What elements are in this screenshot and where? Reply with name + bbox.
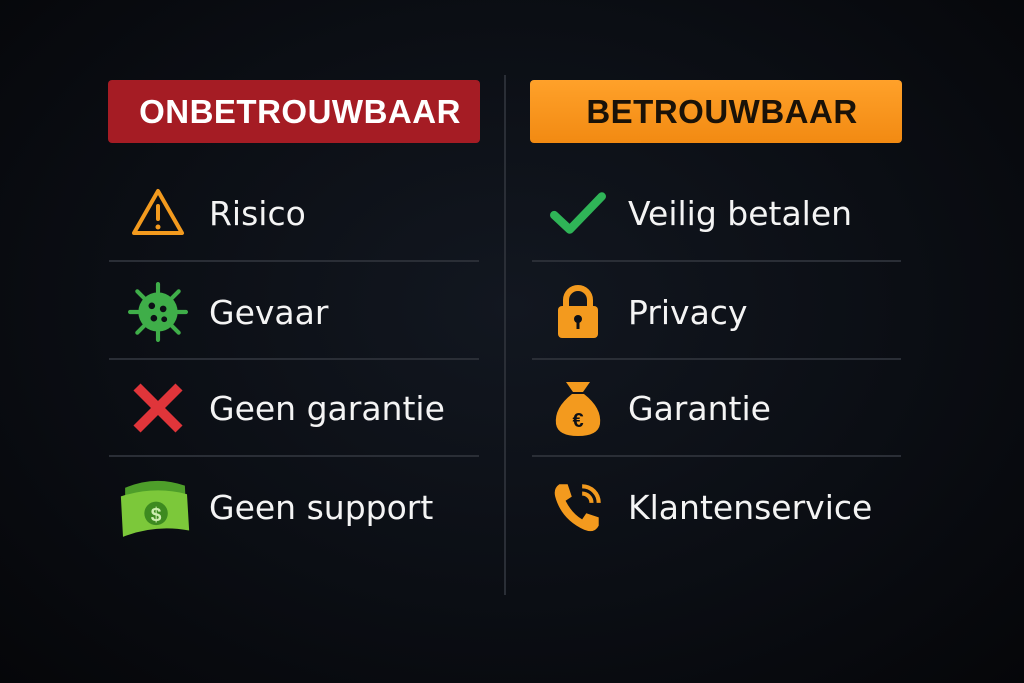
icon: warning: [132, 188, 184, 235]
icon: money bag euro: €: [572, 410, 584, 432]
icon: money bag euro: [556, 382, 600, 436]
icon: check: [550, 192, 606, 234]
row: geen support: Geen support: [209, 488, 433, 526]
header: onbetrouwbaar: ONBETROUWBAAR: [139, 92, 461, 130]
row: garantie: [556, 382, 771, 436]
row: privacy: [558, 285, 747, 338]
row: garantie: Garantie: [628, 388, 771, 428]
row: veilig betalen: Veilig betalen: [628, 194, 852, 232]
row: risico: Risico: [209, 194, 306, 232]
icon: red cross: [134, 384, 182, 432]
header: betrouwbaar: BETROUWBAAR: [586, 92, 858, 130]
icon: lock: [558, 285, 598, 338]
row: klantenservice: [554, 484, 872, 532]
header: onbetrouwbaar: [108, 80, 480, 143]
row: privacy: Privacy: [628, 292, 747, 332]
header: betrouwbaar: [530, 80, 902, 143]
row: risico: [132, 188, 306, 235]
row: geen garantie: Geen garantie: [209, 388, 445, 428]
row: veilig betalen: [550, 192, 852, 234]
icon: phone: [554, 484, 601, 532]
row: klantenservice: Klantenservice: [628, 488, 872, 526]
row: gevaar: Gevaar: [209, 292, 328, 332]
row: gevaar: [128, 282, 328, 342]
icon: money: [120, 480, 190, 537]
icon: money: $: [151, 505, 162, 526]
divider: vertical: [504, 75, 506, 595]
icon: virus: [128, 282, 188, 342]
row: geen garantie: [134, 384, 445, 432]
row: geen support: [120, 480, 433, 537]
